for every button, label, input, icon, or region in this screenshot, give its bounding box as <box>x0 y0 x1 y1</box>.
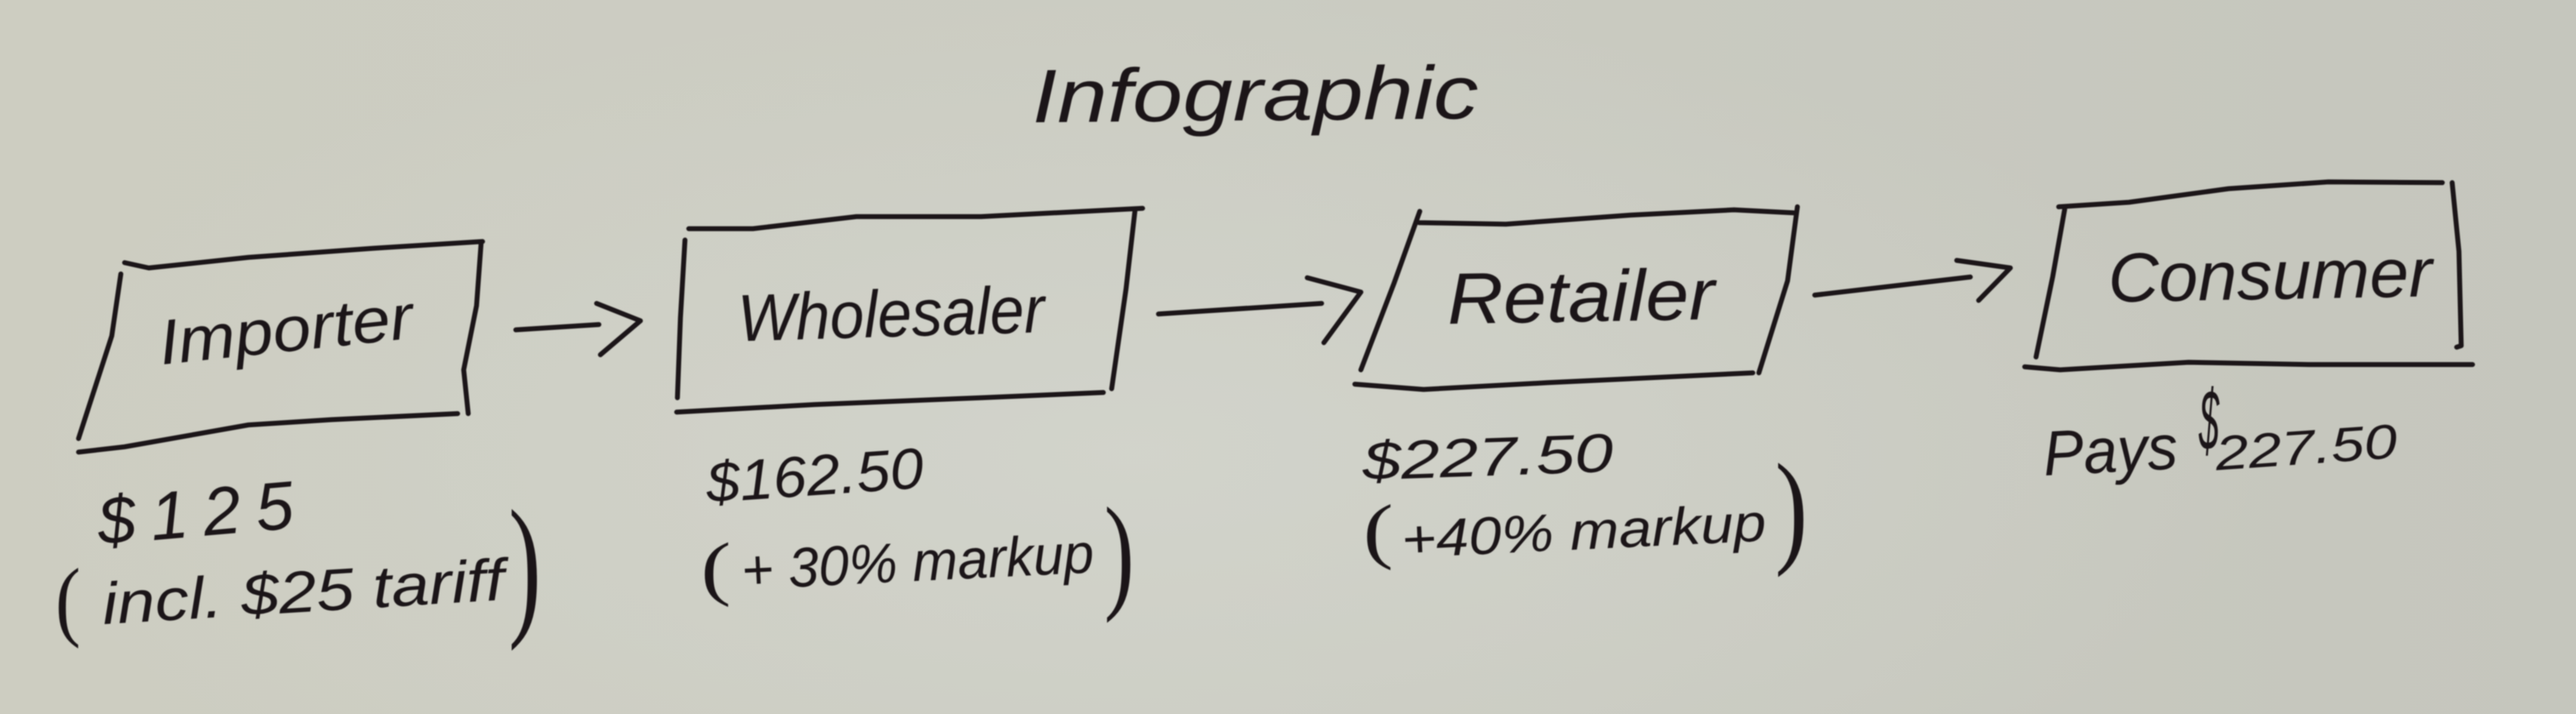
wholesaler markup note: ( <box>701 529 731 608</box>
panel: consumer <box>2025 182 2473 489</box>
consumer payment: $ <box>2198 372 2220 469</box>
panel: wholesaler <box>677 208 1143 623</box>
wholesaler box <box>677 208 1143 412</box>
arrow: retailer to consumer <box>1815 260 2010 300</box>
consumer payment: Pays <box>2041 411 2180 489</box>
panel: importer <box>55 242 541 652</box>
title: Infographic <box>1032 51 1479 139</box>
wholesaler markup note <box>701 482 1134 623</box>
panel: retailer <box>1355 207 1808 578</box>
importer tariff note: ) <box>508 479 541 652</box>
wholesaler price: $162.50 <box>703 436 925 515</box>
retailer markup note: ) <box>1775 439 1808 578</box>
importer label: Importer <box>156 281 418 378</box>
wholesaler markup note: + 30% markup <box>740 522 1095 602</box>
consumer payment <box>2041 372 2399 489</box>
importer price: $125 <box>94 468 298 560</box>
importer tariff note: incl. $25 tariff <box>100 546 512 637</box>
consumer box <box>2025 182 2473 370</box>
retailer price: $227.50 <box>1360 423 1614 492</box>
retailer markup note: +40% markup <box>1400 493 1767 569</box>
importer box <box>79 242 483 452</box>
consumer payment: 227.50 <box>2213 414 2399 481</box>
wholesaler label: Wholesaler <box>737 272 1048 355</box>
retailer markup note <box>1363 439 1808 578</box>
wholesaler markup note: ) <box>1104 482 1134 623</box>
arrow: importer to wholesaler <box>516 303 640 355</box>
importer tariff note <box>55 479 541 652</box>
retailer markup note: ( <box>1363 490 1393 571</box>
importer tariff note: ( <box>55 550 81 649</box>
arrow: wholesaler to retailer <box>1158 278 1361 343</box>
retailer label: Retailer <box>1446 254 1719 340</box>
consumer label: Consumer <box>2108 234 2436 317</box>
retailer box <box>1355 207 1797 389</box>
